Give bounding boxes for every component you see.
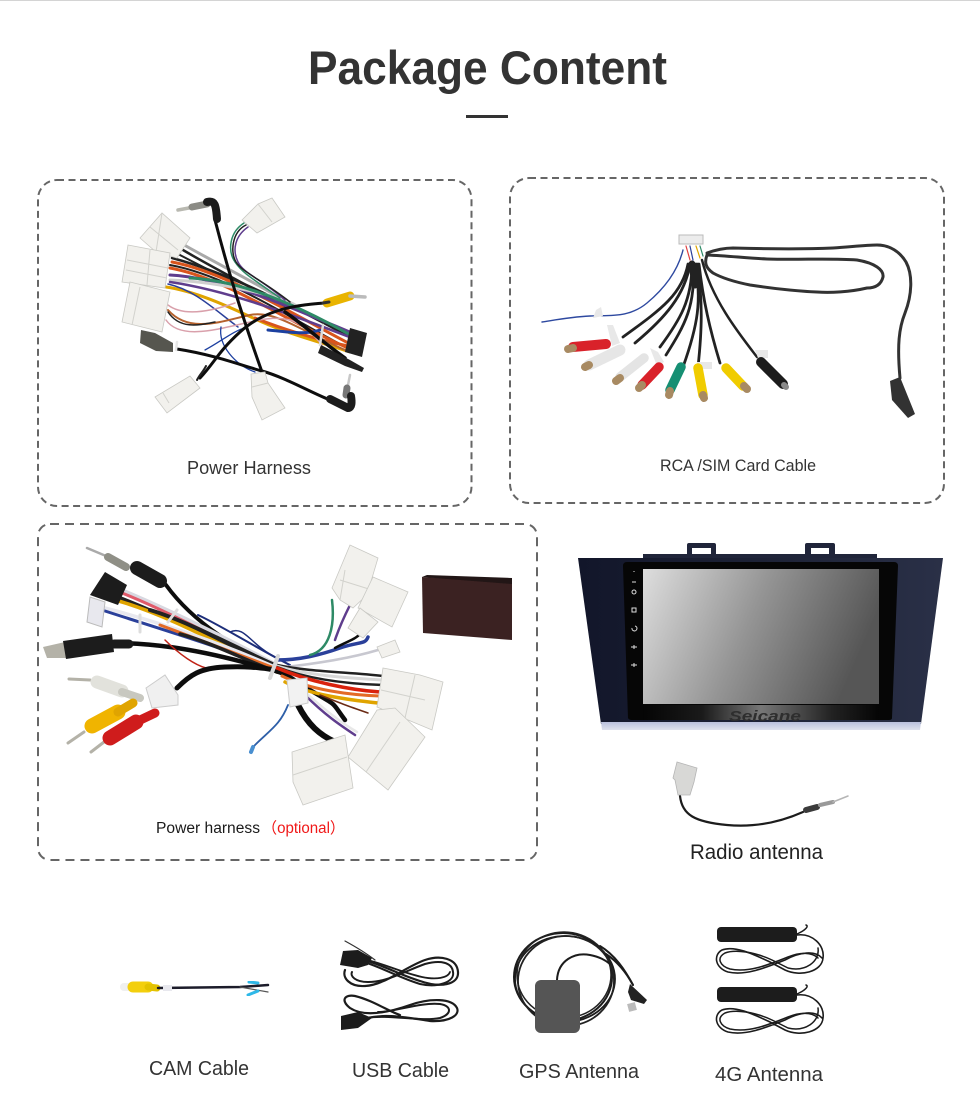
- radio antenna: [673, 762, 848, 864]
- USB cable: [340, 941, 458, 1082]
- head unit: [578, 543, 943, 730]
- label: 4g antenna: 4G Antenna: [715, 1064, 824, 1086]
- label: optional power harness: Power harness: [156, 820, 260, 837]
- silver strip: [601, 722, 921, 730]
- label: cam cable: CAM Cable: [149, 1058, 249, 1080]
- bezel: [623, 562, 898, 720]
- label: optional power harness: [156, 820, 345, 837]
- bezel reflection: [643, 705, 879, 720]
- antenna cable: [673, 762, 848, 826]
- gps illustration: [514, 932, 647, 1033]
- title: Package Content: [308, 41, 667, 94]
- panel: power harness: [38, 180, 472, 506]
- 4G antenna: [715, 925, 824, 1086]
- panel: RCA / SIM card cable: [510, 178, 944, 503]
- usb illustration: [340, 941, 458, 1030]
- label: gps antenna: GPS Antenna: [519, 1061, 640, 1083]
- label: optional power harness: （optional）: [262, 820, 345, 837]
- mounting tabs: [643, 543, 877, 559]
- cable illustration: [542, 235, 915, 418]
- brand logo: Seicane: [729, 708, 801, 725]
- harness illustration: [122, 198, 367, 420]
- CAM cable: [124, 982, 268, 1080]
- label: usb cable: USB Cable: [352, 1060, 449, 1082]
- label: power harness: Power Harness: [187, 458, 311, 478]
- screen: [643, 569, 879, 704]
- panel: optional power harness: [38, 524, 537, 860]
- side buttons: [631, 571, 637, 667]
- cam illustration: [124, 982, 268, 995]
- title underline: [466, 115, 508, 118]
- optional harness illustration: [43, 545, 512, 805]
- label: radio antenna: Radio antenna: [690, 841, 823, 864]
- label: RCA / SIM card cable: RCA /SIM Card Cable: [660, 457, 816, 475]
- 4g illustration: [716, 925, 823, 1033]
- GPS antenna: [514, 932, 647, 1083]
- dash frame: [578, 558, 943, 724]
